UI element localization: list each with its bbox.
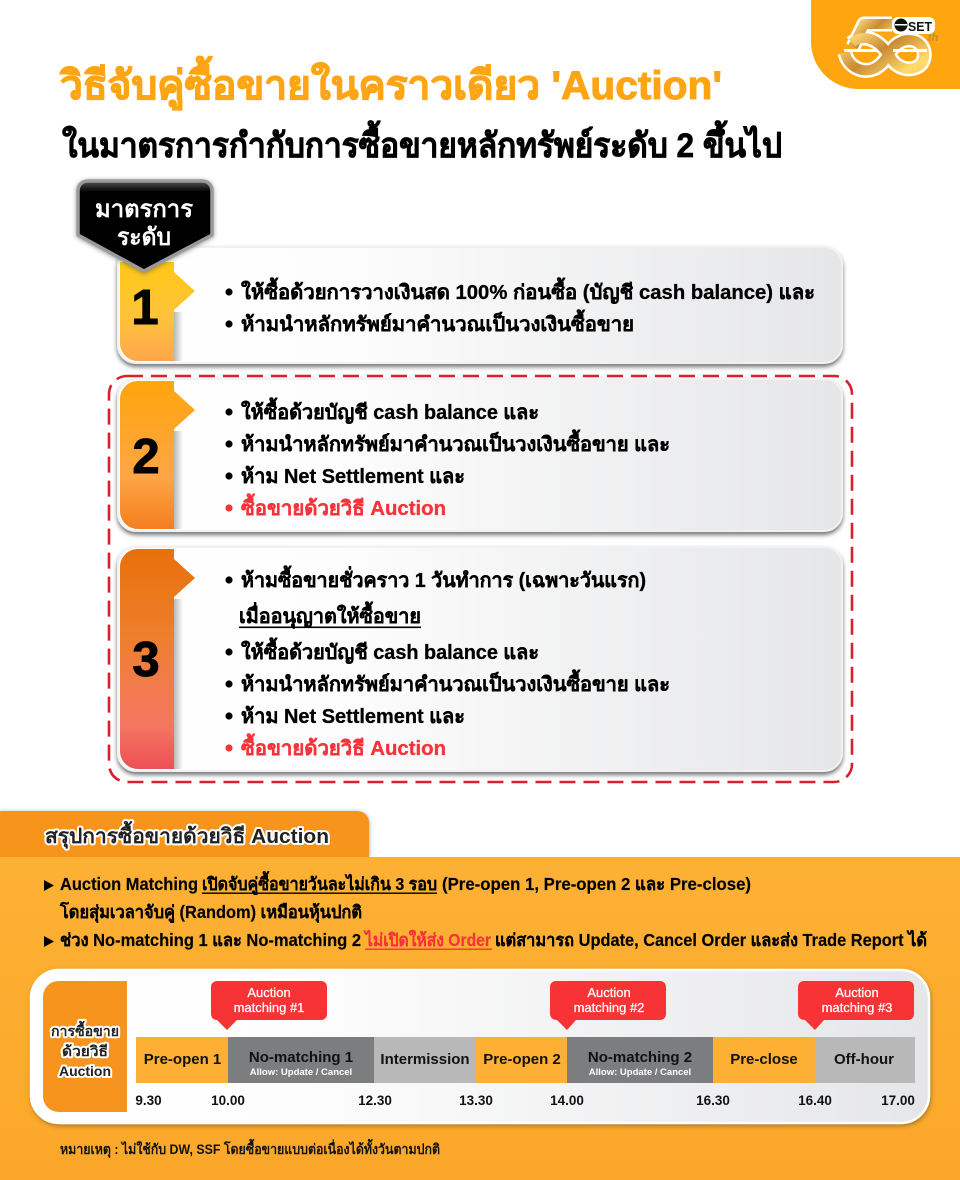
timeline times: 9.30 xyxy=(135,1093,162,1108)
level 2 stripe xyxy=(120,381,195,529)
segment: Pre-close xyxy=(713,1037,815,1083)
timeline times xyxy=(135,1093,915,1108)
summary text: ช่วง No-matching 1 และ No-matching 2 xyxy=(60,930,361,950)
callout: Auction matching 3 xyxy=(798,981,914,1030)
level 1 text: ห้ามนำหลักทรัพย์มาคำนวณเป็นวงเงินซื้อขาย xyxy=(241,309,634,336)
segment: Pre-close: Pre-close xyxy=(730,1051,798,1068)
timeline times: 10.00 xyxy=(211,1093,245,1108)
section tab: สรุปการซื้อขายด้วยวิธี Auction xyxy=(0,811,369,857)
level 3 text: ให้ซื้อด้วยบัญชี cash balance และ xyxy=(241,637,539,664)
panel: level 2 xyxy=(118,379,842,531)
summary text: ไม่เปิดให้ส่ง Order xyxy=(363,929,491,950)
callout: Auction matching 2: Auction xyxy=(587,985,631,1000)
callout: Auction matching 3: Auction xyxy=(835,985,879,1000)
segment: Pre-open 2: Pre-open 2 xyxy=(483,1051,561,1068)
segment: Off-hour: Off-hour xyxy=(834,1051,894,1068)
badge: มาตรการระดับ: มาตรการ xyxy=(95,196,193,223)
summary text xyxy=(44,871,927,950)
callout: Auction matching 1 xyxy=(211,981,327,1030)
segment: Intermission xyxy=(374,1037,476,1083)
timeline times: 13.30 xyxy=(459,1093,493,1108)
logo tab: SET 50th xyxy=(811,0,960,89)
callout: Auction matching 3: matching #3 xyxy=(822,1000,892,1015)
summary text: (Pre-open 1, Pre-open 2 และ Pre-close) xyxy=(442,874,751,894)
level 2 text: ให้ซื้อด้วยบัญชี cash balance และ xyxy=(241,397,539,424)
segment: Off-hour xyxy=(815,1037,915,1083)
level 3 text: ห้ามนำหลักทรัพย์มาคำนวณเป็นวงเงินซื้อขาย และ xyxy=(241,669,670,696)
timeline label: Auction xyxy=(59,1063,111,1079)
segment: No-matching 1: Allow: Update / Cancel xyxy=(250,1067,352,1078)
panel: summary background xyxy=(0,857,960,1180)
callout: Auction matching 2: matching #2 xyxy=(574,1000,644,1015)
level 3 stripe xyxy=(120,549,195,769)
segment: Pre-open 1 xyxy=(136,1037,228,1083)
number 3: 3 xyxy=(132,633,160,687)
panel: level 3 xyxy=(118,547,842,771)
footnote: หมายเหตุ : ไม่ใช้กับ DW, SSF โดยซื้อขายแบบต่อเนื่องได้ทั้งวันตามปกติ xyxy=(60,1138,440,1158)
segment: No-matching 1: No-matching 1 xyxy=(249,1049,353,1066)
summary text: โดยสุ่มเวลาจับคู่ (Random) เหมือนหุ้นปกติ xyxy=(59,901,362,924)
summary text: เปิดจับคู่ซื้อขายวันละไม่เกิน 3 รอบ xyxy=(202,871,437,896)
badge: มาตรการระดับ: ระดับ xyxy=(117,224,171,251)
segment: No-matching 2 xyxy=(567,1037,713,1083)
level 1 text xyxy=(225,277,815,336)
level 3 text: ห้าม Net Settlement และ xyxy=(241,705,465,728)
segment: Pre-open 2 xyxy=(476,1037,567,1083)
timeline times: 16.40 xyxy=(798,1093,832,1108)
timeline times: 17.00 xyxy=(881,1093,915,1108)
level 3 text: เมื่ออนุญาตให้ซื้อขาย xyxy=(239,601,421,629)
timeline times: 16.30 xyxy=(696,1093,730,1108)
level 3 text xyxy=(225,565,670,760)
segment: Intermission: Intermission xyxy=(380,1051,470,1068)
badge: มาตรการระดับ xyxy=(78,181,212,271)
summary text: Auction Matching xyxy=(60,874,198,894)
icon: SET 50th logo xyxy=(844,17,939,70)
number 1: 1 xyxy=(131,281,159,335)
number 2: 2 xyxy=(132,430,160,484)
timeline times: 14.00 xyxy=(550,1093,584,1108)
level 1 stripe xyxy=(120,262,195,361)
timeline label xyxy=(43,981,127,1112)
callout: Auction matching 1: matching #1 xyxy=(234,1000,304,1015)
timeline label: ด้วยวิธี xyxy=(62,1043,108,1059)
level 3 text: ห้ามซื้อขายชั่วคราว 1 วันทำการ (เฉพาะวันแรก) xyxy=(241,565,646,592)
dashed highlight around levels 2 and 3 xyxy=(109,376,852,782)
title: วิธีจับคู่ซื้อขายในคราวเดียว 'Auction' xyxy=(59,56,722,110)
level 2 text: ห้าม Net Settlement และ xyxy=(241,465,465,488)
level 3 text: ซื้อขายด้วยวิธี Auction xyxy=(241,733,446,760)
panel: auction timeline xyxy=(31,970,929,1123)
segment: No-matching 1 xyxy=(228,1037,374,1083)
panel: level 1 xyxy=(118,247,842,363)
segment: No-matching 2: No-matching 2 xyxy=(588,1049,692,1066)
section tab: สรุปการซื้อขายด้วยวิธี Auction: สรุปการซื้อขายด้วยวิธี Auction xyxy=(45,820,329,849)
level 2 text: ซื้อขายด้วยวิธี Auction xyxy=(241,493,446,520)
icon: SET 50th logo: th xyxy=(928,32,939,44)
segment: No-matching 2: Allow: Update / Cancel xyxy=(589,1067,691,1078)
callout: Auction matching 1: Auction xyxy=(247,985,291,1000)
subtitle: ในมาตรการกำกับการซื้อขายหลักทรัพย์ระดับ 2 ขึ้นไป xyxy=(62,120,782,165)
icon: SET 50th logo: SET xyxy=(908,19,932,34)
timeline times: 12.30 xyxy=(358,1093,392,1108)
level 1 text: ให้ซื้อด้วยการวางเงินสด 100% ก่อนซื้อ (บัญชี cash balance) และ xyxy=(241,277,815,304)
timeline label: การซื้อขาย xyxy=(51,1020,119,1039)
level 2 text: ห้ามนำหลักทรัพย์มาคำนวณเป็นวงเงินซื้อขาย และ xyxy=(241,429,670,456)
callout: Auction matching 2 xyxy=(550,981,666,1030)
segment: Pre-open 1: Pre-open 1 xyxy=(144,1051,221,1068)
summary text: แต่สามารถ Update, Cancel Order และส่ง Trade Report ได้ xyxy=(495,929,927,950)
level 2 text xyxy=(225,397,670,520)
